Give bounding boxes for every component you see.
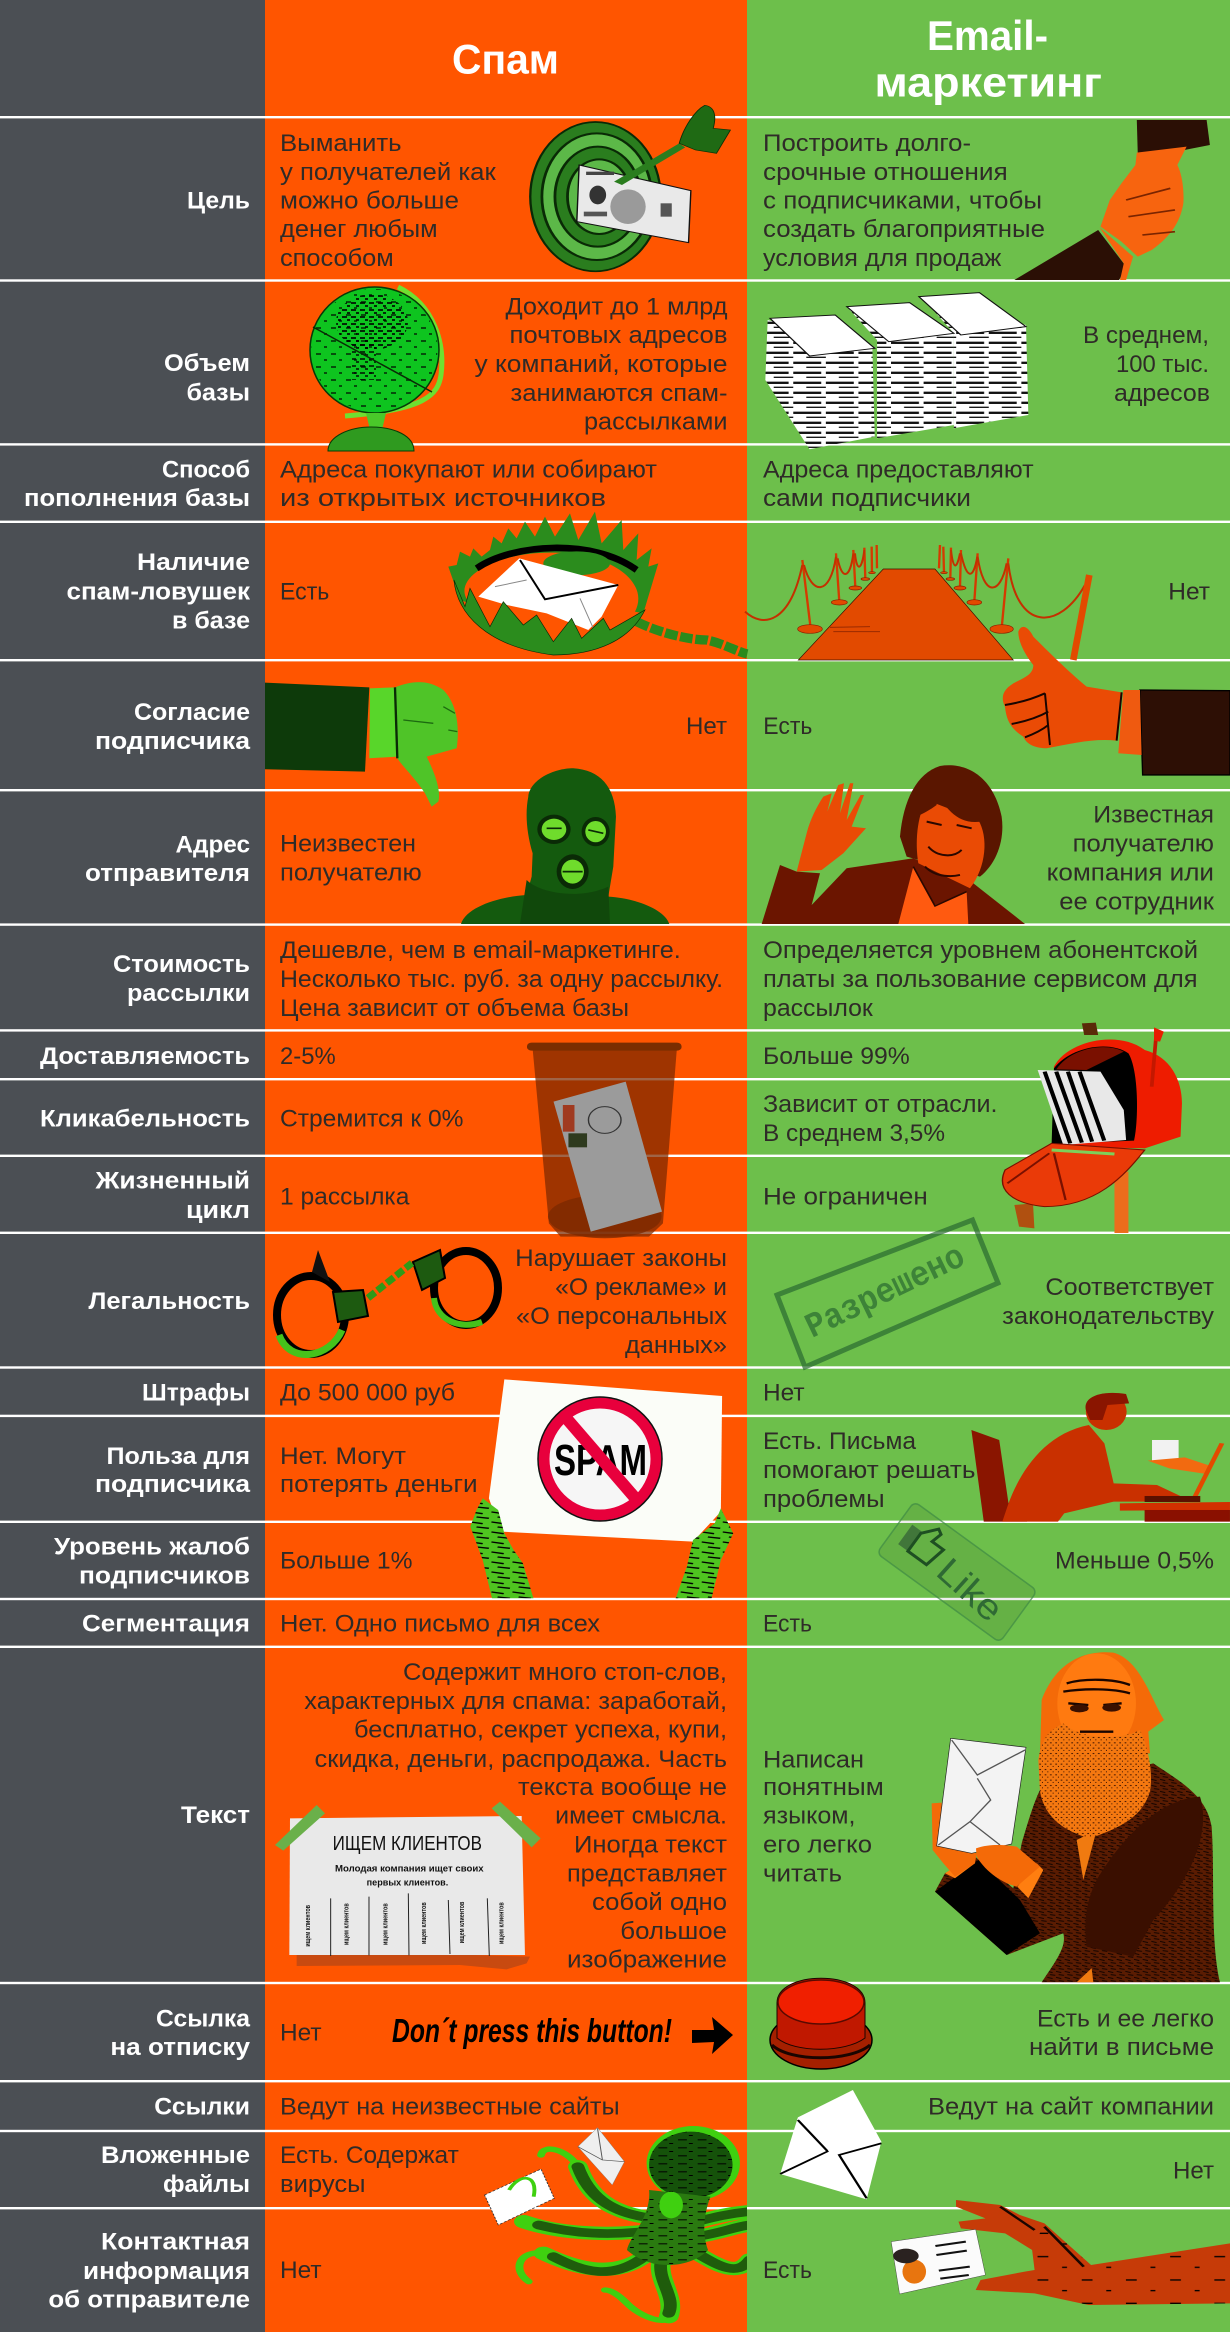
label: Сегментация	[82, 1611, 250, 1638]
spam cell: Нет	[280, 2020, 322, 2046]
icon: tear-off notice: ИЩЕМ КЛИЕНТОВ	[333, 1832, 482, 1855]
label	[54, 1533, 250, 1590]
email cell: 100 тыс.	[1116, 351, 1209, 378]
email cell: компания или	[1047, 860, 1214, 887]
label: Цель	[187, 188, 250, 214]
label	[48, 2229, 250, 2314]
label: Наличие	[137, 549, 250, 576]
spam cell: Адреса покупают или собирают	[280, 457, 657, 484]
label	[95, 1443, 251, 1498]
label: Штрафы	[142, 1380, 250, 1406]
label	[110, 2006, 251, 2061]
label: Ссылки	[154, 2094, 250, 2120]
icon: bear trap with envelope and chain	[448, 512, 747, 655]
email cell	[1002, 1274, 1214, 1330]
spam cell: Несколько тыс. руб. за одну рассылку.	[280, 966, 723, 993]
icon: tear-off notice: ищем клиентов	[457, 1901, 466, 1943]
icon: man at laptop with gift	[971, 1393, 1230, 1522]
icon: thumb up	[1003, 627, 1230, 775]
row: ссылка на отписку	[110, 2006, 1214, 2061]
spam cell: собой одно	[592, 1889, 727, 1916]
spam cell: Больше 1%	[280, 1548, 412, 1574]
icon: tear-off notice: ищем клиентов	[341, 1903, 350, 1945]
label: цикл	[186, 1197, 250, 1224]
spam cell	[280, 831, 422, 887]
email cell: помогают решать	[763, 1457, 976, 1484]
header: spam: Спам	[452, 36, 559, 82]
header: email-marketing: маркетинг	[874, 58, 1102, 106]
label: подписчика	[95, 1471, 251, 1498]
label: на отписку	[110, 2034, 251, 2061]
spam cell: бесплатно, секрет успеха, купи,	[354, 1717, 727, 1744]
row: спам-ловушки	[66, 549, 1210, 635]
email cell: Есть	[763, 713, 812, 740]
email cell: Не ограничен	[763, 1184, 928, 1211]
row: стоимость рассылки	[113, 937, 1198, 1022]
email cell: Зависит от отрасли.	[763, 1091, 998, 1118]
icon: tear-off notice: Молодая компания ищет своих	[335, 1863, 484, 1873]
icon: Tolstoy holding envelope	[932, 1652, 1220, 1982]
header: email-marketing: Email-	[927, 12, 1048, 59]
label: Доставляемость	[40, 1043, 250, 1070]
icon: like badge	[877, 1501, 1037, 1643]
email cell: Есть. Письма	[763, 1428, 917, 1455]
email cell	[1029, 2006, 1214, 2061]
icon: no-spam sign held by hands	[470, 1379, 733, 1598]
spam cell: Дешевле, чем в email-маркетинге.	[280, 937, 681, 964]
spam cell: у получателей как	[280, 159, 496, 186]
email cell	[1047, 802, 1215, 916]
email cell: получателю	[1073, 831, 1214, 858]
icon: globe	[310, 287, 442, 451]
row: уровень жалоб	[54, 1533, 1214, 1590]
icon: paper stacks	[765, 293, 1028, 449]
email cell: Нет	[1173, 2158, 1214, 2185]
label: отправителя	[85, 860, 250, 887]
email cell: проблемы	[763, 1486, 885, 1513]
spam cell: Нарушает законы	[515, 1245, 727, 1272]
label	[101, 2142, 250, 2198]
spam cell: характерных для спама: заработай,	[304, 1688, 727, 1715]
email cell	[763, 1428, 976, 1513]
spam cell: получателю	[280, 860, 422, 887]
label: Жизненный	[94, 1168, 250, 1195]
email cell: Написан	[763, 1746, 864, 1774]
email cell: сами подписчики	[763, 485, 971, 512]
spam cell: имеет смысла.	[555, 1803, 727, 1830]
spam cell	[280, 2142, 459, 2198]
email cell: Есть	[763, 1611, 812, 1638]
icon: balaclava figure	[461, 768, 669, 924]
spam cell: Нет	[686, 713, 727, 740]
email cell: найти в письме	[1029, 2034, 1214, 2061]
label: Легальность	[88, 1288, 250, 1315]
spam cell: Доходит до 1 млрд	[506, 294, 728, 321]
spam cell: потерять деньги	[280, 1471, 478, 1498]
spam cell: способом	[280, 245, 394, 272]
email cell: Есть	[763, 2257, 812, 2284]
spam cell	[280, 1443, 478, 1498]
label: Уровень жалоб	[54, 1533, 250, 1560]
email cell: Больше 99%	[763, 1043, 910, 1070]
label	[66, 549, 251, 635]
email cell: Определяется уровнем абонентской	[763, 937, 1198, 964]
spam cell: Нет. Могут	[280, 1443, 406, 1470]
email cell: Нет	[763, 1380, 805, 1406]
spam cell: денег любым	[280, 216, 438, 243]
spam cell: скидка, деньги, распродажа. Часть	[314, 1746, 727, 1773]
row: вложенные файлы	[101, 2142, 1214, 2198]
email cell	[763, 937, 1198, 1022]
email cell: языком,	[763, 1803, 856, 1830]
spam cell: большое	[620, 1918, 727, 1945]
email cell: платы за пользование сервисом для	[763, 966, 1198, 993]
spam cell	[280, 937, 723, 1022]
icon: red mailbox with letters	[1002, 1023, 1182, 1233]
email cell: В среднем,	[1083, 322, 1209, 349]
spam cell: 1 рассылка	[280, 1184, 410, 1211]
email cell: законодательству	[1002, 1303, 1214, 1330]
icon: tear-off notice	[275, 1802, 541, 1969]
label: Способ	[162, 457, 250, 484]
spam cell: Нет	[280, 2257, 322, 2284]
icon: thumb down	[265, 682, 458, 807]
handwritten caption: Don´t press this button!	[392, 2012, 672, 2049]
icon: tear-off notice: ищем клиентов	[380, 1903, 389, 1945]
row: контактная информация	[48, 2229, 812, 2314]
label: об отправителе	[48, 2286, 250, 2314]
spam cell	[304, 1659, 727, 1974]
label	[164, 350, 250, 407]
spam cell: Ведут на неизвестные сайты	[280, 2094, 620, 2120]
label: Кликабельность	[40, 1106, 250, 1133]
icon: wastebasket with crumpled letter	[527, 1043, 682, 1238]
row: кликабельность	[40, 1091, 998, 1147]
icon: handshake	[1014, 120, 1210, 280]
icon: black arrow	[692, 2017, 733, 2054]
icon: white envelope	[780, 2090, 881, 2199]
spam cell: можно больше	[280, 188, 459, 214]
email cell: рассылок	[763, 995, 873, 1022]
label: пополнения базы	[24, 485, 250, 512]
spam cell: «О рекламе» и	[555, 1274, 727, 1301]
icon: target with dart and banknote	[530, 105, 730, 271]
row: цель	[187, 130, 1045, 272]
email cell	[763, 457, 1034, 512]
icon: approved stamp	[777, 1220, 998, 1367]
row: легальность	[88, 1245, 1214, 1359]
spam cell: почтовых адресов	[510, 322, 728, 349]
icon: tear-off notice: ищем клиентов	[419, 1902, 428, 1944]
email cell: условия для продаж	[763, 245, 1001, 272]
spam cell: из открытых источников	[280, 485, 606, 512]
icon: like badge: Like	[929, 1550, 1012, 1630]
label: подписчика	[95, 728, 251, 755]
spam cell: До 500 000 руб	[280, 1380, 455, 1406]
email cell	[1083, 322, 1210, 407]
label: базы	[186, 380, 250, 407]
spam cell: Иногда текст	[574, 1832, 727, 1858]
icon: tear-off notice: ищем клиентов	[496, 1902, 505, 1944]
email cell: читать	[763, 1860, 842, 1887]
spam cell	[515, 1245, 727, 1359]
email cell	[763, 130, 1045, 272]
email cell: Известная	[1093, 802, 1214, 829]
spam cell: изображение	[567, 1947, 727, 1974]
spam cell: Стремится к 0%	[280, 1106, 464, 1133]
label	[95, 699, 251, 755]
row: ссылки	[154, 2094, 1214, 2120]
email cell: его легко	[763, 1832, 872, 1858]
icon: tear-off notice: первых клиентов.	[367, 1877, 448, 1887]
icon: tear-off notice: ищем клиентов	[303, 1905, 312, 1947]
email cell: Ведут на сайт компании	[928, 2094, 1214, 2120]
label: в базе	[172, 608, 250, 635]
email cell: Построить долго-	[763, 130, 971, 157]
spam cell: занимаются спам-	[510, 380, 728, 407]
row: жизненный цикл	[94, 1168, 928, 1224]
spam cell: у компаний, которые	[474, 351, 728, 378]
spam cell	[474, 294, 728, 435]
spam cell: Неизвестен	[280, 831, 416, 858]
label: Текст	[181, 1802, 250, 1829]
label: Вложенные	[101, 2142, 250, 2169]
row: способ пополнения базы	[24, 457, 1034, 512]
spam cell: текста вообще не	[518, 1774, 727, 1801]
label	[94, 1168, 250, 1224]
spam cell	[280, 130, 496, 272]
icon: waving man	[762, 765, 1025, 924]
spam cell: 2-5%	[280, 1043, 336, 1070]
spam cell: «О персональных	[516, 1303, 727, 1330]
spam cell	[280, 457, 657, 512]
icon: red carpet with stanchions	[745, 545, 1089, 660]
spam cell: рассылками	[584, 408, 728, 435]
label: Согласие	[134, 699, 250, 726]
email cell: создать благоприятные	[763, 216, 1045, 243]
label: Адрес	[176, 832, 250, 859]
spam cell: Есть. Содержат	[280, 2142, 459, 2169]
spam cell: Нет. Одно письмо для всех	[280, 1611, 600, 1638]
spam cell: Содержит много стоп-слов,	[403, 1659, 727, 1686]
row: текст	[181, 1659, 884, 1974]
row: согласие подписчика	[95, 699, 812, 755]
label	[113, 951, 250, 1007]
email cell: срочные отношения	[763, 159, 1008, 186]
row: адрес отправителя	[85, 802, 1215, 916]
spam cell: Цена зависит от объема базы	[280, 995, 629, 1022]
label: Объем	[164, 350, 250, 377]
email cell	[763, 1091, 998, 1147]
icon: red button	[770, 1978, 872, 2069]
email cell: с подписчиками, чтобы	[763, 188, 1042, 214]
label: спам-ловушек	[66, 578, 251, 605]
row: штрафы	[142, 1380, 805, 1406]
email cell: понятным	[763, 1774, 884, 1801]
spam cell: Есть	[280, 578, 329, 605]
label	[85, 832, 250, 887]
row: объем базы	[164, 294, 1210, 435]
spam cell: Выманить	[280, 130, 402, 157]
email cell: В среднем 3,5%	[763, 1120, 945, 1147]
label: Ссылка	[156, 2006, 251, 2032]
icon: no-spam sign held by hands: SPAM	[554, 1436, 647, 1485]
label: информация	[83, 2258, 250, 2285]
email cell: Есть и ее легко	[1037, 2006, 1214, 2032]
spam cell: данных»	[625, 1332, 727, 1359]
row: сегментация	[82, 1611, 812, 1638]
email cell: адресов	[1114, 380, 1210, 407]
email cell: Меньше 0,5%	[1055, 1548, 1214, 1574]
icon: hand holding business card	[891, 2200, 1230, 2305]
label: файлы	[163, 2171, 250, 2198]
label	[24, 457, 250, 512]
spam cell: вирусы	[280, 2171, 366, 2198]
label: Контактная	[101, 2229, 250, 2256]
label: рассылки	[127, 980, 250, 1007]
row: польза для подписчика	[95, 1428, 976, 1513]
icon: approved stamp: Разрешено	[799, 1237, 972, 1348]
label: Польза для	[106, 1443, 250, 1470]
icon: octopus with envelopes	[485, 2126, 750, 2320]
icon: handcuffs	[277, 1250, 498, 1354]
header: email-marketing	[874, 12, 1102, 106]
email cell: Соответствует	[1045, 1274, 1214, 1301]
email cell: Нет	[1168, 578, 1210, 605]
label: Стоимость	[113, 951, 250, 978]
email cell: ее сотрудник	[1059, 889, 1215, 916]
spam cell: представляет	[567, 1860, 727, 1887]
email cell	[763, 1746, 884, 1887]
row: доставляемость	[40, 1043, 910, 1070]
label: подписчиков	[79, 1562, 250, 1590]
email cell: Адреса предоставляют	[763, 457, 1034, 484]
